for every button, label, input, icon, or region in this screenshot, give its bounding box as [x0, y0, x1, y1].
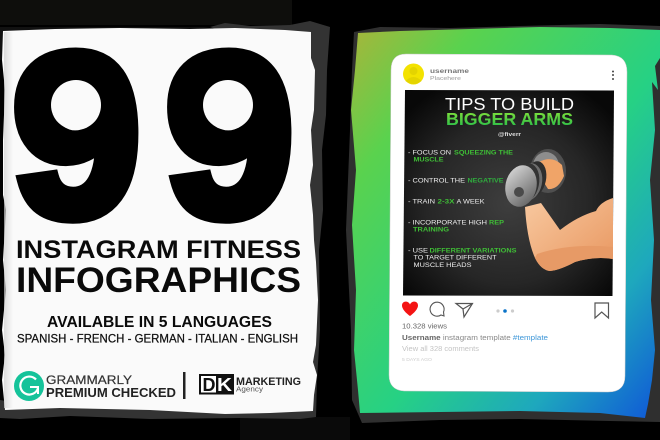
tip 5: TO TARGET DIFFERENT [414, 254, 497, 262]
tip 3: A WEEK [456, 198, 485, 206]
icon: share [456, 304, 472, 317]
panel: left torn paper [0, 6, 330, 419]
placeholder: Placehere [430, 76, 461, 82]
tip 4 [408, 220, 505, 234]
username: username [430, 68, 469, 75]
post title: TIPS TO BUILD [445, 94, 574, 114]
tip 5 [408, 248, 517, 269]
timestamp: 5 DAYS AGO [402, 357, 433, 362]
subheading: languages: AVAILABLE IN 5 LANGUAGES [47, 314, 272, 331]
tip 4: - INCORPORATE HIGH [408, 220, 487, 226]
tip 5: MUSCLE HEADS [414, 262, 472, 269]
tip 2: NEGATIVE [468, 178, 504, 184]
tip 1: MUSCLE [414, 156, 444, 164]
tip 3 [408, 198, 485, 206]
icon: comment [430, 302, 444, 316]
icon: profile avatar [403, 64, 424, 84]
carousel dots [496, 309, 514, 313]
instagram post card [389, 54, 627, 392]
language list: SPANISH - FRENCH - GERMAN - ITALIAN - ENGLISH [17, 332, 298, 346]
comments link: View all 328 comments [402, 346, 480, 353]
divider [183, 372, 186, 399]
panel: right gradient torn frame [346, 24, 660, 423]
post title accent: BIGGER ARMS [446, 109, 573, 129]
icon: bookmark [595, 303, 608, 318]
tip 2 [408, 178, 504, 184]
icon: more menu [612, 70, 614, 80]
logo: DK marketing agency: D [202, 375, 216, 395]
logo: DK marketing agency: K [217, 375, 232, 395]
tip 3: - TRAIN [408, 198, 435, 206]
grammarly text: GRAMMARLY [46, 373, 132, 387]
icon: heart [402, 302, 418, 316]
views count: 10.328 views [402, 324, 448, 330]
handle: @fiverr [498, 132, 522, 138]
tip 2: - CONTROL THE [408, 178, 466, 184]
tip 5: DIFFERENT VARIATIONS [430, 248, 517, 254]
logo: DK marketing agency: Agency [236, 386, 264, 394]
caption: Username instagram template #template [402, 335, 548, 342]
grammarly text [46, 373, 176, 400]
tip 5: - USE [408, 248, 429, 254]
logo: DK marketing agency: MARKETING [236, 376, 301, 388]
illustration: dumbbell [501, 149, 566, 210]
heading: infographics: INFOGRAPHICS [16, 261, 301, 300]
tip 4: TRAINING [413, 226, 449, 234]
tip 1: - FOCUS ON [408, 150, 451, 156]
illustration: flexed arm [525, 198, 613, 271]
heading: instagram fitness: INSTAGRAM FITNESS [16, 236, 301, 264]
tip 1 [408, 150, 514, 164]
tip 4: REP [489, 220, 505, 226]
icon: grammarly badge [14, 371, 44, 401]
post image [403, 90, 614, 296]
big number 99: 99 [12, 6, 318, 266]
tip 3: 2-3X [438, 198, 455, 206]
grammarly text: PREMIUM CHECKED [46, 386, 176, 400]
logo: DK marketing agency [199, 374, 301, 395]
tip 1: SQUEEZING THE [454, 150, 514, 156]
